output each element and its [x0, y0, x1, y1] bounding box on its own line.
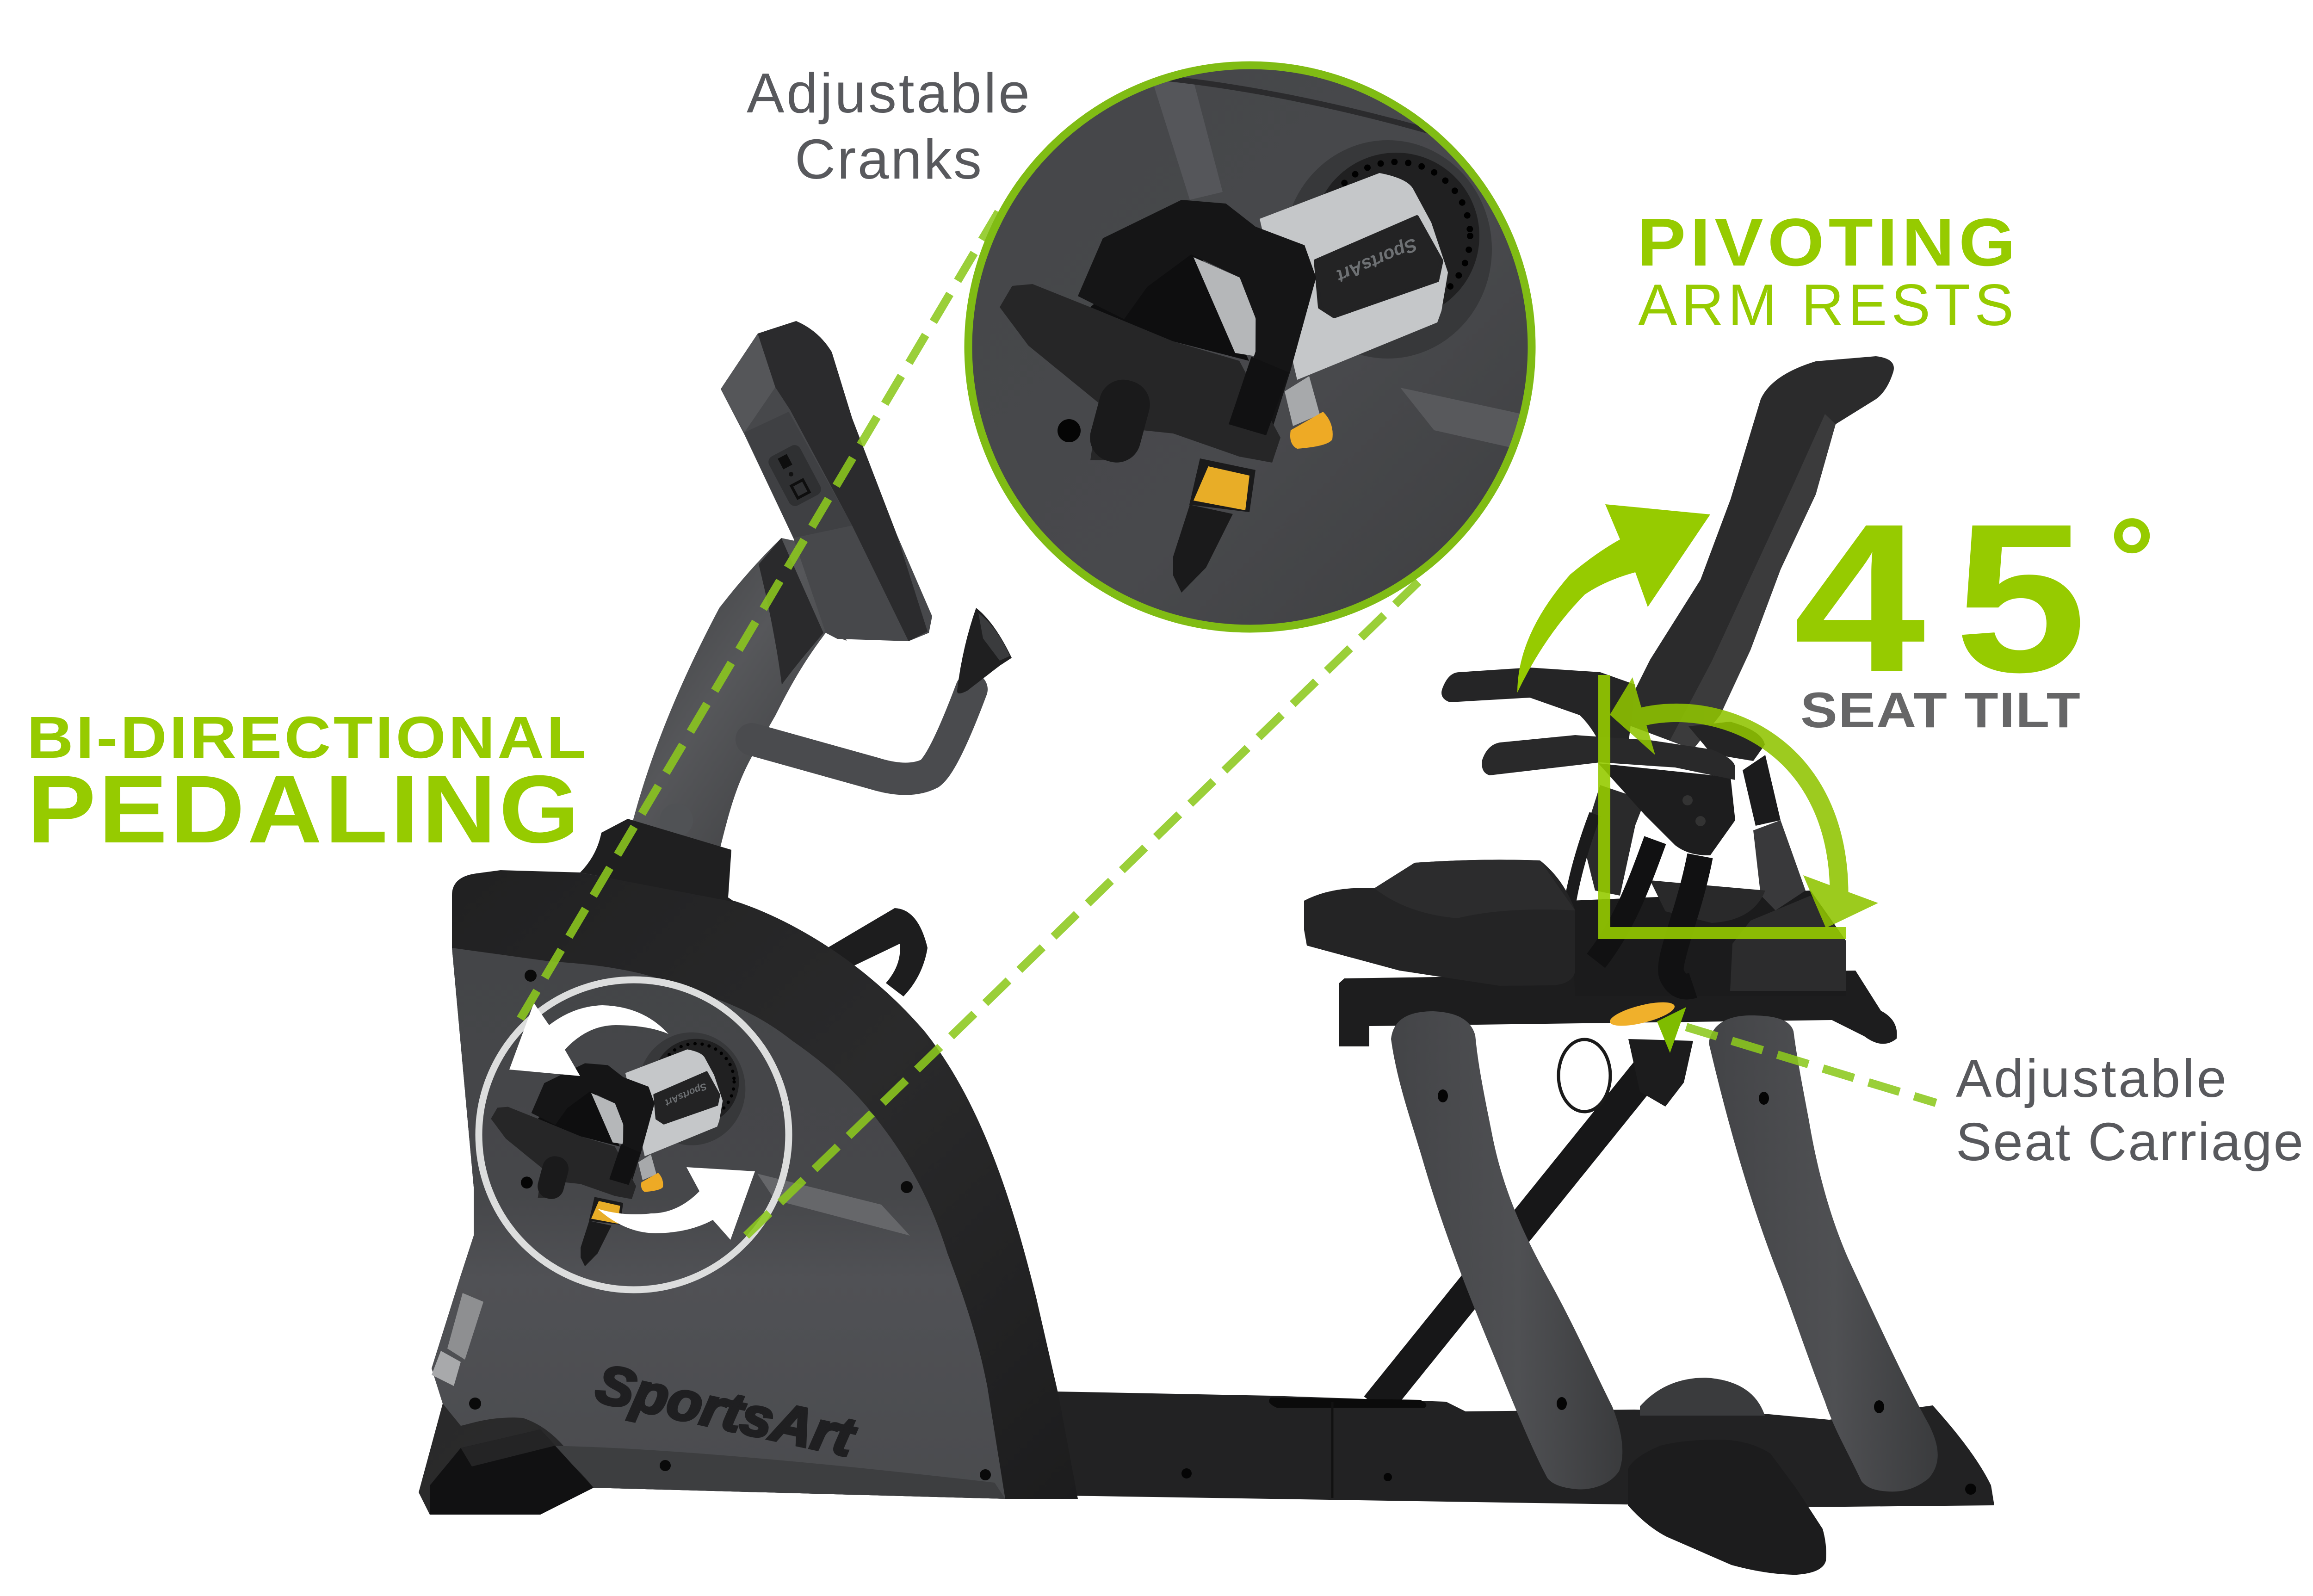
thick green tilt arrow — [1517, 504, 1710, 693]
callout circle: adjustable cranks close-up: SportsArt — [1333, 234, 1420, 286]
mini pedal view — [491, 1033, 745, 1266]
bike: left leg — [1391, 1011, 1622, 1489]
bike: gray side panel — [430, 948, 1005, 1515]
bike: armrest upper — [1441, 668, 1635, 745]
heading: arm rests: ARM RESTS — [1638, 272, 2014, 338]
white circle around pedal — [479, 980, 789, 1290]
heading: pedaling: PEDALING — [27, 756, 582, 863]
white rotation arrow: top — [509, 1003, 668, 1076]
bike: console screen — [721, 321, 932, 641]
label: adjustable seat carriage line 2: Seat Carriage — [1956, 1112, 2303, 1172]
bike: diagonal strut and cable — [1376, 1039, 1693, 1406]
dashed leader: seat carriage — [1686, 1027, 1936, 1103]
bike: handlebar — [752, 608, 1012, 779]
bike: front foot pad — [1628, 1440, 1826, 1575]
heading: bi-directional: BI-DIRECTIONAL — [27, 705, 588, 771]
callout circle: adjustable cranks close-up — [967, 64, 1533, 630]
degree sign: ° — [2109, 495, 2155, 622]
dashed leader: pedal to upper circle left — [520, 199, 1006, 1019]
label: cranks line: Cranks — [795, 128, 982, 191]
label: seat tilt: SEAT TILT — [1800, 682, 2081, 738]
bike: base beam — [1032, 1392, 1994, 1507]
bike: seat frame and post — [1570, 755, 1846, 996]
white rotation arrow: bottom — [598, 1167, 755, 1240]
bike: armrest lower with bracket — [1482, 735, 1735, 855]
curved seat tilt arrow — [1610, 677, 1878, 928]
dashed leader: pedal to upper circle right — [746, 579, 1421, 1236]
bike: right leg — [1709, 1015, 1938, 1491]
label: adjustable cranks: Adjustable — [747, 62, 1030, 124]
bike: foot pad hump — [1640, 1378, 1765, 1416]
bike: seat rail — [1339, 971, 1897, 1046]
seat carriage arrowhead — [1657, 1007, 1686, 1053]
bike: rear pedal strap — [823, 908, 928, 996]
seat tilt angle right-angle marker — [1604, 675, 1846, 933]
bike: base housing — [419, 819, 1078, 1515]
bike: seat cushion — [1304, 860, 1575, 986]
bike: backrest — [1583, 356, 1894, 896]
heading: pivoting: PIVOTING — [1637, 204, 2020, 280]
big number: 45: 45 — [1794, 480, 2087, 717]
logo: SportsArt: SportsArt — [591, 1353, 861, 1469]
bike: console column — [631, 538, 847, 851]
label: adjustable seat carriage line 1: Adjustable — [1956, 1048, 2226, 1108]
mini pedal view: SportsArt — [663, 1081, 708, 1108]
